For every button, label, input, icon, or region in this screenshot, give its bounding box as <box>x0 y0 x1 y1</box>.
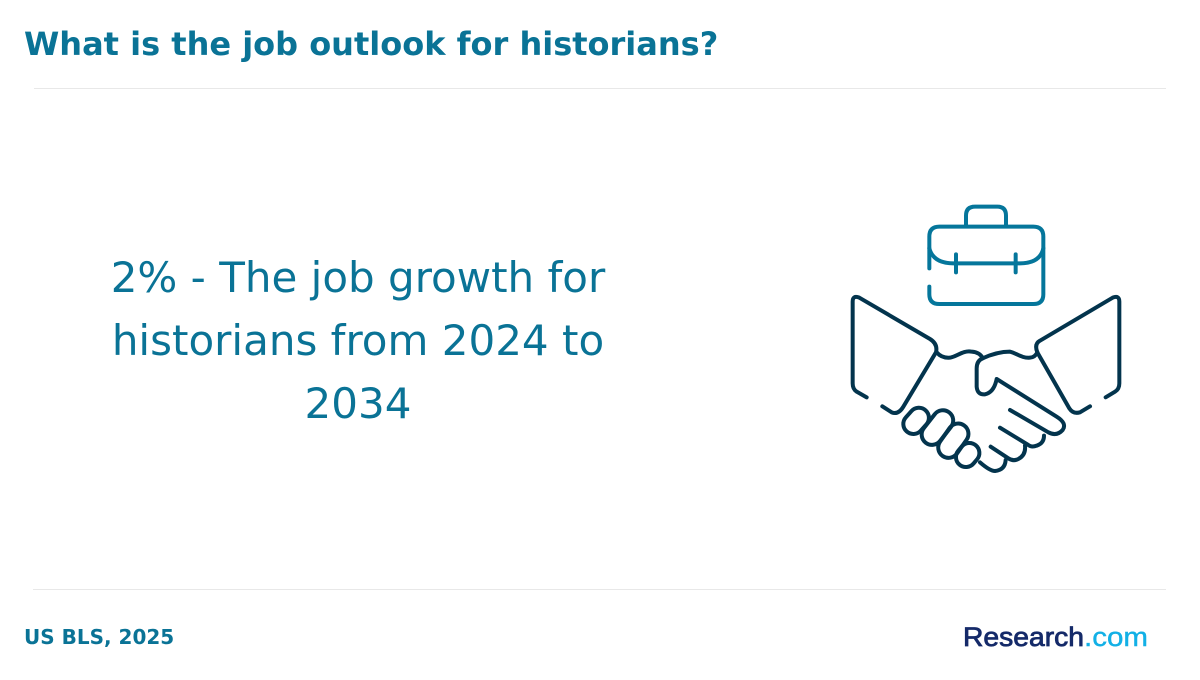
icon: briefcase <box>929 207 1043 304</box>
main statistic text: historians from 2024 to <box>112 316 604 365</box>
main statistic text <box>111 253 606 428</box>
source: US BLS, 2025 <box>24 625 174 649</box>
logo: Research.com: .com <box>1084 622 1148 652</box>
title: What is the job outlook for historians? <box>24 25 718 63</box>
icon: handshake with briefcase <box>850 204 1122 473</box>
main statistic text: 2034 <box>305 379 411 428</box>
main statistic text: 2% - The job growth for <box>111 253 605 302</box>
icon: handshake <box>853 297 1119 471</box>
logo: Research.com: Research <box>963 622 1084 652</box>
logo: Research.com <box>963 622 1148 652</box>
